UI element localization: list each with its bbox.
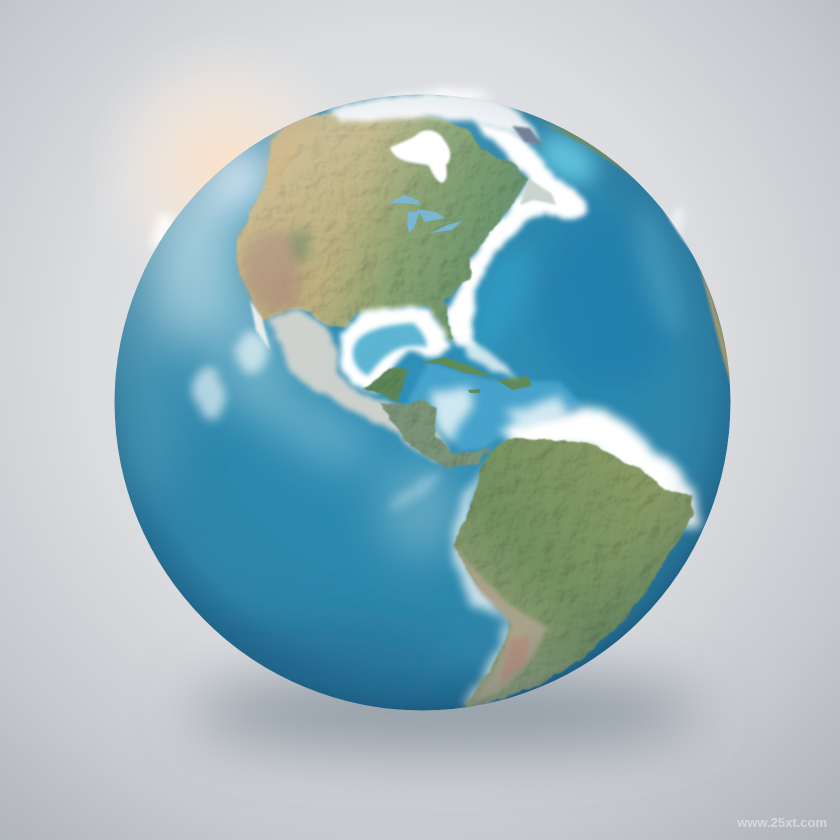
hispaniola: [497, 376, 532, 390]
sunlight sheen: [115, 94, 536, 397]
gulf surf: [340, 307, 450, 392]
southern mexico and central america: [380, 400, 490, 468]
sphere shading: [240, 94, 730, 710]
caribbean islands: [423, 357, 532, 393]
south america land: [452, 437, 695, 708]
great lakes: [389, 195, 462, 233]
caribbean clouds: [430, 390, 570, 450]
arctic ice and top clouds: [325, 93, 540, 140]
ocean: [114, 94, 730, 710]
globe ground shadow: [190, 672, 700, 752]
pacific haze: [120, 145, 460, 700]
globe: [114, 93, 733, 711]
africa limb: [698, 266, 730, 386]
pacific clouds: [195, 332, 444, 514]
cuba: [423, 357, 493, 377]
atlantic water tones: [476, 125, 683, 384]
bahamas: [462, 338, 520, 378]
outer clouds on globe rim: [149, 90, 684, 248]
gulf of mexico and caribbean shallows: [340, 307, 582, 450]
baja california: [250, 300, 270, 350]
andes relief: [453, 545, 548, 705]
coastal white surf: Atlantic: [445, 122, 588, 350]
warm light glow: [60, 10, 400, 340]
canadian maritimes: [520, 178, 556, 205]
watermark: www.25xt.com: [736, 815, 827, 830]
mexico land: [268, 308, 448, 462]
south america surf and clouds: [448, 408, 700, 708]
gulf water: [353, 323, 427, 376]
north america land: [237, 108, 530, 340]
greenland limb: [542, 122, 632, 178]
caribbean water: [407, 362, 582, 450]
hudson bay: [390, 130, 450, 183]
baffin rocks: [512, 126, 542, 145]
yucatan: [363, 367, 410, 403]
rocky mountains relief: [242, 116, 316, 312]
europe limb clouds: [664, 213, 694, 256]
lakes and hudson bay: [389, 130, 462, 233]
jamaica: [468, 389, 480, 393]
